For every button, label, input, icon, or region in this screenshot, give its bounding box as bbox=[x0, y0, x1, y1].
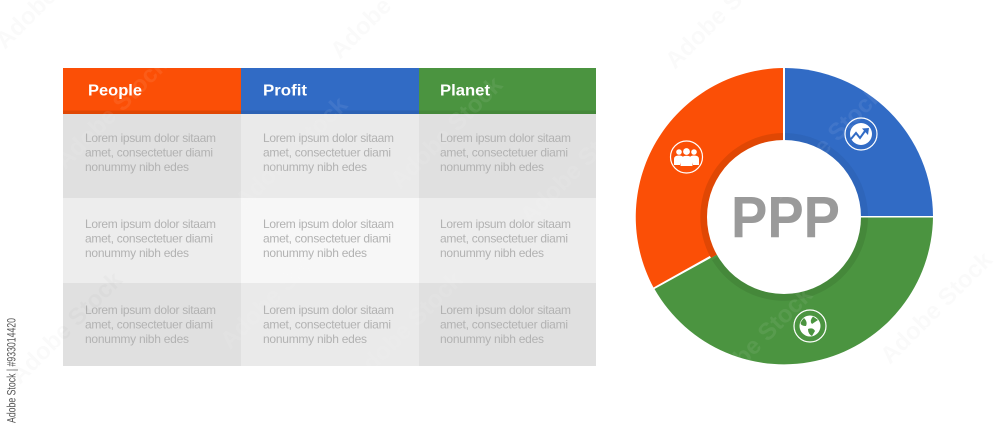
text: row 1 column 3: nonummy nibh edes bbox=[440, 160, 544, 174]
text: row 2 column 1: amet, consectetuer diami bbox=[85, 232, 213, 246]
icon: globe bbox=[794, 310, 826, 342]
text: row 1 column 2: amet, consectetuer diami bbox=[263, 146, 391, 160]
watermark overlay: Adobe Stock bbox=[765, 81, 888, 204]
text: row 3 column 1: Lorem ipsum dolor sitaam bbox=[85, 303, 216, 317]
inner shadow ring: blue bbox=[785, 133, 868, 216]
text: row 2 column 1: Lorem ipsum dolor sitaam bbox=[85, 217, 216, 231]
icon: people group bbox=[670, 141, 702, 173]
header: Profit bbox=[241, 68, 419, 114]
watermark overlay: Adobe Stock bbox=[515, 106, 638, 229]
header: Planet bbox=[419, 68, 596, 114]
text: row 1 column 3: Lorem ipsum dolor sitaam bbox=[440, 131, 571, 145]
text: row 3 column 2: Lorem ipsum dolor sitaam bbox=[263, 303, 394, 317]
text: row 1 column 1: amet, consectetuer diami bbox=[85, 146, 213, 160]
text: row 3 column 1: nonummy nibh edes bbox=[85, 332, 189, 346]
text: row 1 column 1: nonummy nibh edes bbox=[85, 160, 189, 174]
text: row 3 column 3: nonummy nibh edes bbox=[440, 332, 544, 346]
watermark overlay: Adobe Stock bbox=[215, 231, 338, 354]
text: row 2 column 2: nonummy nibh edes bbox=[263, 246, 367, 260]
chart: PPP donut bbox=[636, 68, 933, 364]
centre label: PPP bbox=[731, 185, 840, 250]
text: row 1 column 3: amet, consectetuer diami bbox=[440, 146, 568, 160]
text: row 2 column 2: Lorem ipsum dolor sitaam bbox=[263, 217, 394, 231]
watermark overlay: Adobe Stock bbox=[345, 266, 468, 389]
segment: People (orange) bbox=[636, 68, 783, 288]
text: row 1 column 2: Lorem ipsum dolor sitaam bbox=[263, 131, 394, 145]
icon: growth chart bbox=[845, 118, 877, 150]
text: row 2 column 3: Lorem ipsum dolor sitaam bbox=[440, 217, 571, 231]
text: row 2 column 1: nonummy nibh edes bbox=[85, 246, 189, 260]
inner shadow ring: orange bbox=[700, 133, 783, 258]
watermark overlay: Adobe Stock bbox=[385, 71, 508, 194]
stock id caption: Adobe Stock | #933014420 bbox=[6, 318, 18, 423]
table cell backgrounds bbox=[63, 114, 596, 366]
watermark overlay: Adobe Stock bbox=[50, 51, 173, 174]
header: People: People bbox=[88, 82, 142, 100]
inner shadow ring: green bbox=[712, 218, 868, 301]
text: row 3 column 2: amet, consectetuer diami bbox=[263, 318, 391, 332]
text: row 2 column 3: nonummy nibh edes bbox=[440, 246, 544, 260]
text: row 2 column 3: amet, consectetuer diami bbox=[440, 232, 568, 246]
text: row 3 column 1: amet, consectetuer diami bbox=[85, 318, 213, 332]
header: Profit: Profit bbox=[263, 82, 307, 100]
panel: table bbox=[63, 68, 596, 366]
header: Planet: Planet bbox=[440, 82, 490, 100]
segment: Planet (green) bbox=[654, 218, 933, 364]
text: row 1 column 2: nonummy nibh edes bbox=[263, 160, 367, 174]
text: row 1 column 1: Lorem ipsum dolor sitaam bbox=[85, 131, 216, 145]
segment: Profit (blue) bbox=[785, 68, 933, 216]
text: row 3 column 2: nonummy nibh edes bbox=[263, 332, 367, 346]
text: row 2 column 2: amet, consectetuer diami bbox=[263, 232, 391, 246]
text: row 3 column 3: amet, consectetuer diami bbox=[440, 318, 568, 332]
header: People bbox=[63, 68, 241, 114]
watermark overlay: Adobe Stock bbox=[230, 91, 353, 214]
text: row 3 column 3: Lorem ipsum dolor sitaam bbox=[440, 303, 571, 317]
centre hole bbox=[707, 140, 861, 294]
watermark overlay: Adobe Stock bbox=[695, 281, 818, 404]
